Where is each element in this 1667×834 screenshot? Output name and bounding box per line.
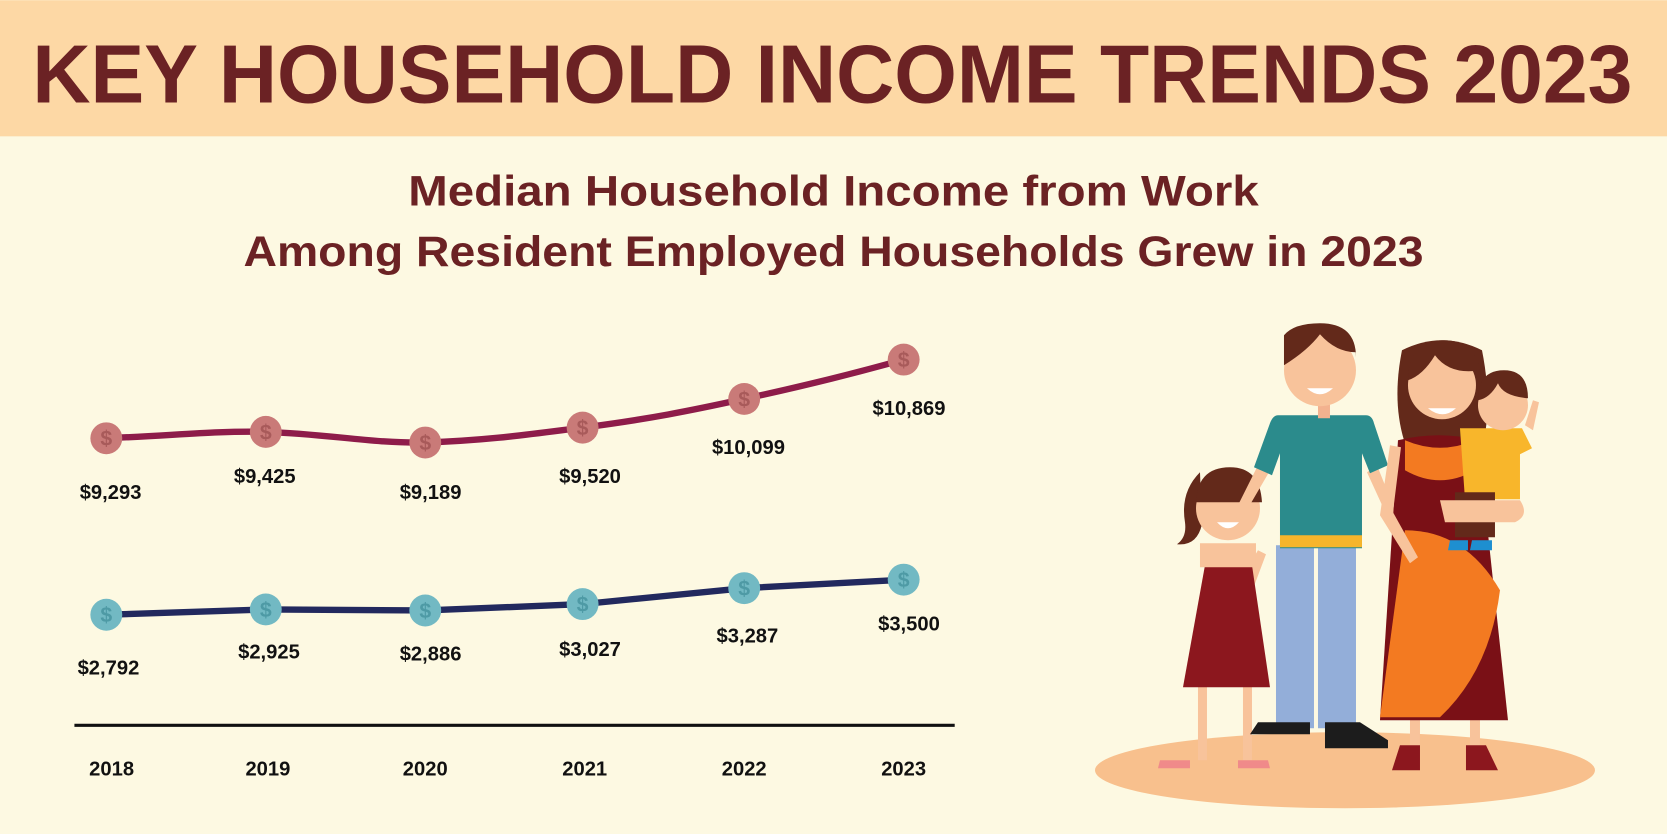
- value labels: [78, 398, 945, 679]
- girl: [1158, 467, 1270, 768]
- title: KEY HOUSEHOLD INCOME TRENDS 2023: [32, 27, 1632, 120]
- baby: [1440, 370, 1539, 550]
- year labels: 2023: [881, 758, 926, 780]
- year labels: 2020: [403, 758, 448, 780]
- series line: total income: [106, 360, 904, 443]
- coins: bottom series: $: [898, 568, 910, 592]
- coins: top series: [90, 344, 920, 458]
- coins: bottom series: $: [100, 603, 112, 627]
- coins: bottom series: $: [738, 577, 750, 601]
- value labels: $3,027: [559, 639, 621, 661]
- year labels: 2018: [89, 758, 134, 780]
- x axis: [74, 724, 955, 727]
- value labels: $3,500: [878, 614, 940, 636]
- value labels: $9,189: [400, 482, 461, 504]
- value labels: $10,099: [712, 437, 785, 459]
- subtitle: Among Resident Employed Households Grew in 2023: [243, 229, 1424, 276]
- year labels: [89, 758, 926, 780]
- illustration: family: [1095, 323, 1595, 808]
- subtitle: Median Household Income from Work: [408, 168, 1259, 215]
- value labels: $9,520: [559, 466, 621, 488]
- woman: [1380, 340, 1508, 770]
- line chart: median household income: [74, 344, 955, 780]
- value labels: $9,425: [234, 466, 296, 488]
- year labels: 2021: [562, 758, 607, 780]
- series line: per member income: [106, 580, 904, 615]
- value labels: $10,869: [872, 398, 945, 420]
- value labels: $2,886: [400, 643, 461, 665]
- year labels: 2019: [245, 758, 290, 780]
- coins: bottom series: $: [577, 593, 589, 617]
- coins: bottom series: $: [419, 599, 431, 623]
- coins: top series: $: [100, 427, 112, 451]
- value labels: $9,293: [80, 482, 141, 504]
- header band: [0, 0, 1667, 136]
- coins: top series: $: [577, 416, 589, 440]
- man: [1233, 323, 1397, 748]
- value labels: $2,925: [238, 641, 300, 663]
- value labels: $2,792: [78, 657, 139, 679]
- value labels: $3,287: [717, 625, 778, 647]
- subtitle: [243, 168, 1424, 276]
- year labels: 2022: [722, 758, 767, 780]
- coins: top series: $: [738, 387, 750, 411]
- coins: bottom series: [90, 564, 920, 631]
- coins: top series: $: [419, 431, 431, 455]
- floor ellipse: [1095, 732, 1595, 808]
- coins: top series: $: [898, 348, 910, 372]
- coins: bottom series: $: [260, 598, 272, 622]
- coins: top series: $: [260, 420, 272, 444]
